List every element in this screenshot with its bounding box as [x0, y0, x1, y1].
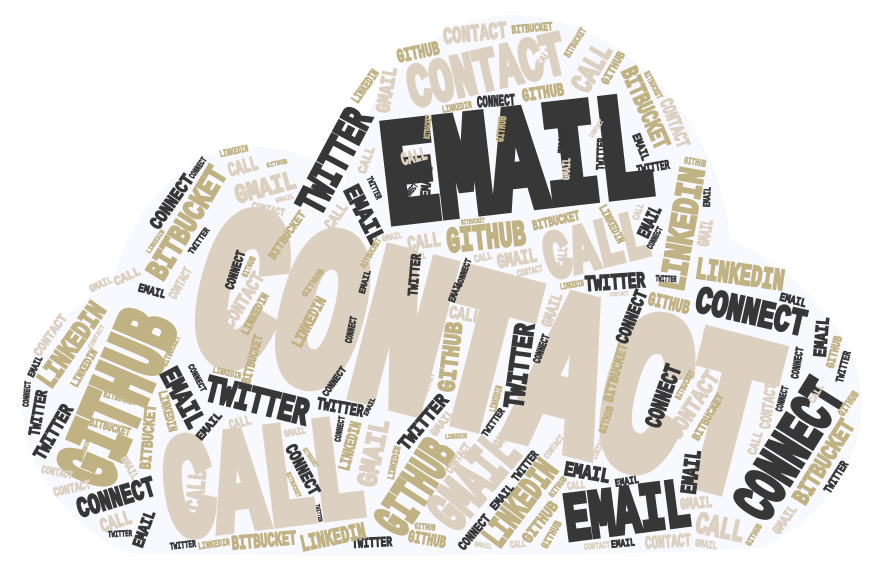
- words: upper lobe: GMAIL: [373, 66, 404, 115]
- words: upper lobe: CALL: [473, 251, 493, 266]
- words: centre and bottom: CONNECT: [321, 365, 350, 399]
- words: upper lobe: GITHUB: [395, 38, 442, 68]
- word: GITHUB large: GITHUB: [42, 298, 202, 502]
- words: centre and bottom: GITHUB: [435, 321, 470, 394]
- words: right lobe: TWITTER: [821, 458, 852, 496]
- words: right lobe: CONTACT: [663, 367, 726, 445]
- words: upper lobe: GITHUB: [495, 115, 510, 143]
- words: centre and bottom: GITHUB: [547, 474, 570, 500]
- words: centre and bottom: LINKEDIN: [476, 453, 567, 556]
- words: centre and bottom: TWITTER: [352, 535, 393, 553]
- words: centre and bottom: LINKEDIN: [489, 385, 506, 414]
- words: upper lobe: CALL: [535, 45, 556, 69]
- words: left lobe: EMAIL: [194, 409, 226, 444]
- words: right lobe: CONNECT: [641, 361, 688, 431]
- words: right lobe: GMAIL: [699, 326, 716, 354]
- words: left lobe: BITBUCKET: [88, 415, 132, 440]
- words: left lobe: TWITTER: [29, 401, 79, 464]
- words: centre and bottom: LINKEDIN: [445, 433, 467, 442]
- words: centre and bottom: TWITTER: [509, 448, 542, 485]
- words: left lobe: GMAIL: [117, 455, 140, 482]
- words: left lobe: GMAIL: [88, 275, 115, 296]
- words: centre and bottom: LINKEDIN: [197, 538, 231, 553]
- words: centre and bottom: GMAIL: [353, 417, 398, 490]
- words: right lobe: CONNECT: [775, 385, 792, 413]
- words: left lobe: CONNECT: [187, 155, 210, 181]
- words: left lobe: EMAIL: [27, 355, 46, 380]
- words: left lobe: LINKEDIN: [155, 389, 180, 433]
- words: right lobe: CONTACT: [757, 382, 781, 430]
- words: upper lobe: GITHUB: [521, 81, 566, 107]
- words: upper lobe: CALL: [631, 202, 648, 222]
- words: centre and bottom: LINKEDIN: [289, 294, 331, 351]
- words: right lobe: EMAIL: [811, 316, 835, 358]
- word: GMAIL lower: GMAIL: [415, 421, 536, 546]
- words: left lobe: GMAIL: [275, 193, 295, 206]
- words: centre and bottom: CONNECT: [344, 316, 361, 344]
- words: left lobe: LINKEDIN: [239, 291, 273, 338]
- words: right lobe: CONNECT: [613, 288, 653, 347]
- words: right lobe: GMAIL: [679, 494, 713, 514]
- words: left lobe: BITBUCKET: [160, 334, 183, 368]
- words: upper lobe: EMAIL: [419, 166, 437, 198]
- words: right lobe: EMAIL: [677, 449, 707, 496]
- words: upper lobe: LINKEDIN: [559, 279, 585, 293]
- words: centre and bottom: CONTACT: [542, 433, 567, 461]
- words: upper lobe: GITHUB: [445, 215, 528, 263]
- words: centre and bottom: CONNECT: [455, 257, 474, 289]
- words: right lobe: CONTACT: [644, 531, 692, 555]
- words: centre and bottom: TWITTER: [315, 396, 365, 423]
- words: upper lobe: [289, 18, 719, 298]
- words: upper lobe: GMAIL: [407, 251, 427, 264]
- words: left lobe: CONNECT: [147, 171, 199, 234]
- words: centre and bottom: TWITTER: [169, 540, 197, 554]
- words: left lobe: CONNECT: [21, 380, 34, 407]
- words: right lobe: GITHUB: [646, 289, 692, 320]
- words: left lobe: TWITTER: [364, 175, 383, 202]
- words: centre and bottom: GMAIL: [428, 407, 457, 440]
- word: CALL upper right: CALL: [536, 200, 658, 300]
- words: centre and bottom: BITBUCKET: [283, 471, 302, 499]
- words: upper lobe: TWITTER: [655, 274, 677, 285]
- words: upper lobe: GITHUB: [683, 156, 707, 171]
- words: centre and bottom: BITBUCKET: [300, 447, 319, 470]
- words: centre and bottom: CONNECT: [455, 511, 494, 553]
- words: centre and bottom: CONTACT: [419, 372, 438, 401]
- words: left lobe: EMAIL: [152, 363, 209, 434]
- words: centre and bottom: LINKEDIN: [336, 420, 366, 473]
- words: left lobe: CONTACT: [52, 477, 93, 500]
- words: right lobe: CONTACT: [590, 435, 609, 461]
- words: left lobe: GITHUB: [240, 255, 259, 279]
- words: right lobe: CONNECT: [691, 281, 810, 347]
- word: GITHUB lower: GITHUB: [365, 430, 470, 548]
- words: right lobe: BITBUCKET: [789, 415, 862, 510]
- words: upper lobe: BITBUCKET: [614, 63, 674, 154]
- words: left lobe: CONTACT: [40, 464, 74, 483]
- words: upper lobe: EMAIL: [629, 132, 652, 163]
- words: right lobe: CALL: [692, 508, 747, 551]
- words: centre and bottom: CONNECT: [333, 415, 348, 443]
- words: left lobe: GMAIL: [232, 166, 299, 211]
- words: upper lobe: BITBUCKET: [461, 217, 485, 228]
- words: centre and bottom: [169, 253, 588, 558]
- words: upper lobe: BITBUCKET: [531, 209, 581, 235]
- word: CONTACT top: CONTACT: [401, 23, 572, 126]
- words: right lobe: EMAIL: [611, 537, 636, 552]
- words: centre and bottom: CONNECT: [280, 442, 322, 499]
- words: upper lobe: EMAIL: [635, 203, 667, 242]
- words: left lobe: TWITTER: [108, 529, 133, 540]
- words: left lobe: TWITTER: [26, 389, 52, 437]
- words: upper lobe: BITBUCKET: [423, 114, 435, 139]
- words: upper lobe: CONNECT: [400, 181, 421, 203]
- words: right lobe: [562, 254, 863, 555]
- words: centre and bottom: CONNECT: [532, 333, 553, 365]
- words: upper lobe: CALL: [406, 230, 442, 257]
- words: upper lobe: CONTACT: [442, 18, 508, 51]
- words: right lobe: CALL: [808, 383, 827, 406]
- words: centre and bottom: EMAIL: [448, 280, 465, 304]
- words: centre and bottom: EMAIL: [363, 397, 378, 417]
- words: centre and bottom: TWITTER: [481, 407, 508, 440]
- words: right lobe: BITBUCKET: [690, 391, 728, 443]
- words: right lobe: BITBUCKET: [674, 368, 698, 402]
- words: centre and bottom: CALL: [510, 539, 527, 552]
- words: left lobe: BITBUCKET: [359, 236, 384, 270]
- words: right lobe: CALL: [745, 429, 767, 457]
- words: upper lobe: TWITTER: [594, 137, 609, 170]
- words: left lobe: LINKEDIN: [77, 439, 92, 463]
- words: centre and bottom: GMAIL: [283, 426, 307, 441]
- words: centre and bottom: CONTACT: [571, 335, 588, 365]
- words: left lobe: TWITTER: [187, 226, 212, 256]
- words: centre and bottom: GITHUB: [414, 522, 436, 533]
- words: centre and bottom: EMAIL: [488, 481, 518, 513]
- words: left lobe: EMAIL: [336, 181, 389, 250]
- words: left lobe: CONTACT: [87, 324, 107, 350]
- words: left lobe: CONTACT: [250, 201, 286, 220]
- words: left lobe: CONNECT: [222, 249, 249, 292]
- words: centre and bottom: GMAIL: [473, 541, 492, 552]
- words: centre and bottom: GITHUB: [540, 519, 565, 551]
- words: right lobe: CONTACT: [584, 540, 611, 553]
- words: left lobe: GITHUB: [266, 158, 289, 171]
- words: upper lobe: CONTACT: [516, 265, 544, 281]
- words: left lobe: CALL: [228, 413, 253, 434]
- words: centre and bottom: TWITTER: [394, 390, 454, 455]
- words: centre and bottom: TWITTER: [314, 504, 324, 523]
- words: upper lobe: LINKEDIN: [653, 165, 715, 294]
- words: centre and bottom: LINKEDIN: [387, 445, 405, 481]
- words: right lobe: EMAIL: [562, 459, 611, 490]
- words: left lobe: CONNECT: [74, 473, 159, 526]
- words: right lobe: GITHUB: [837, 389, 863, 419]
- words: left lobe: CALL: [321, 200, 352, 233]
- words: left lobe: EMAIL: [130, 508, 160, 550]
- words: centre and bottom: CONTACT: [443, 440, 474, 476]
- words: centre and bottom: GITHUB: [406, 528, 447, 554]
- words: right lobe: CALL: [567, 480, 586, 493]
- words: right lobe: EMAIL: [614, 475, 640, 491]
- words: left lobe: CONTACT: [218, 268, 270, 333]
- words: centre and bottom: LINKEDIN: [298, 519, 368, 558]
- words: upper lobe: CONNECT: [645, 225, 666, 251]
- words: right lobe: BITBUCKET: [601, 342, 632, 404]
- words: right lobe: GITHUB: [744, 522, 765, 548]
- words: centre and bottom: EMAIL: [358, 269, 373, 295]
- words: upper lobe: GITHUB: [599, 49, 629, 87]
- words: left lobe: BITBUCKET: [141, 161, 236, 287]
- words: centre and bottom: GITHUB: [300, 267, 327, 299]
- words: upper lobe: CALL: [399, 145, 429, 171]
- words: centre and bottom: CALL: [447, 303, 482, 329]
- words: left lobe: BITBUCKET: [239, 333, 267, 385]
- words: centre and bottom: GITHUB: [519, 498, 563, 547]
- words: left lobe: CALL: [98, 507, 135, 539]
- words: right lobe: GITHUB: [824, 334, 846, 370]
- words: centre and bottom: BITBUCKET: [231, 528, 297, 556]
- words: left lobe: LINKEDIN: [68, 347, 101, 390]
- words: left lobe: CONNECT: [185, 363, 208, 394]
- words: upper lobe: GMAIL: [496, 245, 539, 275]
- words: centre and bottom: TWITTER: [500, 322, 543, 410]
- word: EMAIL bottom: EMAIL: [560, 469, 695, 561]
- words: right lobe: CONNECT: [790, 346, 807, 380]
- words: centre and bottom: GMAIL: [538, 291, 567, 330]
- words: left lobe: BITBUCKET: [266, 208, 309, 262]
- words: right lobe: GMAIL: [694, 538, 718, 553]
- words: right lobe: TWITTER: [835, 350, 855, 384]
- words: upper lobe: CALL: [554, 246, 571, 268]
- words: right lobe: CONTACT: [609, 290, 629, 298]
- words: upper lobe: BITBUCKET: [563, 26, 590, 60]
- words: left lobe: CALL: [355, 144, 379, 176]
- words: left lobe: [21, 144, 389, 550]
- words: right lobe: EMAIL: [778, 290, 808, 311]
- words: upper lobe: EMAIL: [556, 126, 572, 154]
- words: upper lobe: CALL: [566, 38, 621, 99]
- words: left lobe: CONTACT: [31, 311, 71, 359]
- words: right lobe: GMAIL: [770, 503, 801, 538]
- words: left lobe: LINKEDIN: [219, 144, 249, 161]
- words: left lobe: CALL: [111, 264, 143, 289]
- words: upper lobe: GMAIL: [381, 231, 403, 244]
- words: upper lobe: CONTACT: [654, 96, 694, 151]
- words: right lobe: LINKEDIN: [693, 254, 786, 300]
- words: upper lobe: CONTACT: [588, 119, 606, 140]
- words: centre and bottom: GMAIL: [490, 412, 525, 453]
- words: upper lobe: TWITTER: [636, 157, 671, 178]
- words: upper lobe: TWITTER: [289, 101, 384, 223]
- words: left lobe: EMAIL: [136, 281, 167, 302]
- words: upper lobe: BITBUCKET: [641, 70, 664, 101]
- words: left lobe: CALL: [181, 469, 214, 511]
- words: upper lobe: LINKEDIN: [595, 203, 627, 246]
- words: left lobe: LINKEDIN: [145, 229, 167, 256]
- words: right lobe: GITHUB: [598, 405, 618, 435]
- words: upper lobe: BITBUCKET: [511, 20, 553, 37]
- words: left lobe: LINKEDIN: [33, 297, 114, 395]
- words: upper lobe: GMAIL: [561, 158, 574, 180]
- words: upper lobe: LINKEDIN: [349, 67, 383, 106]
- words: left lobe: CALL: [226, 153, 261, 183]
- words: left lobe: BITBUCKET: [102, 390, 138, 409]
- words: left lobe: LINKEDIN: [212, 365, 242, 382]
- words: left lobe: TWITTER: [200, 370, 313, 436]
- words: centre and bottom: TWITTER: [406, 253, 426, 297]
- words: upper lobe: GMAIL: [695, 218, 719, 248]
- words: upper lobe: TWITTER: [584, 269, 646, 298]
- words: left lobe: BITBUCKET: [137, 404, 161, 470]
- words: upper lobe: CONNECT: [476, 92, 516, 112]
- words: left lobe: CONTACT: [166, 265, 196, 302]
- words: upper lobe: LINKEDIN: [441, 101, 473, 117]
- word: EMAIL largest: EMAIL: [375, 72, 661, 265]
- words: upper lobe: EMAIL: [703, 187, 714, 207]
